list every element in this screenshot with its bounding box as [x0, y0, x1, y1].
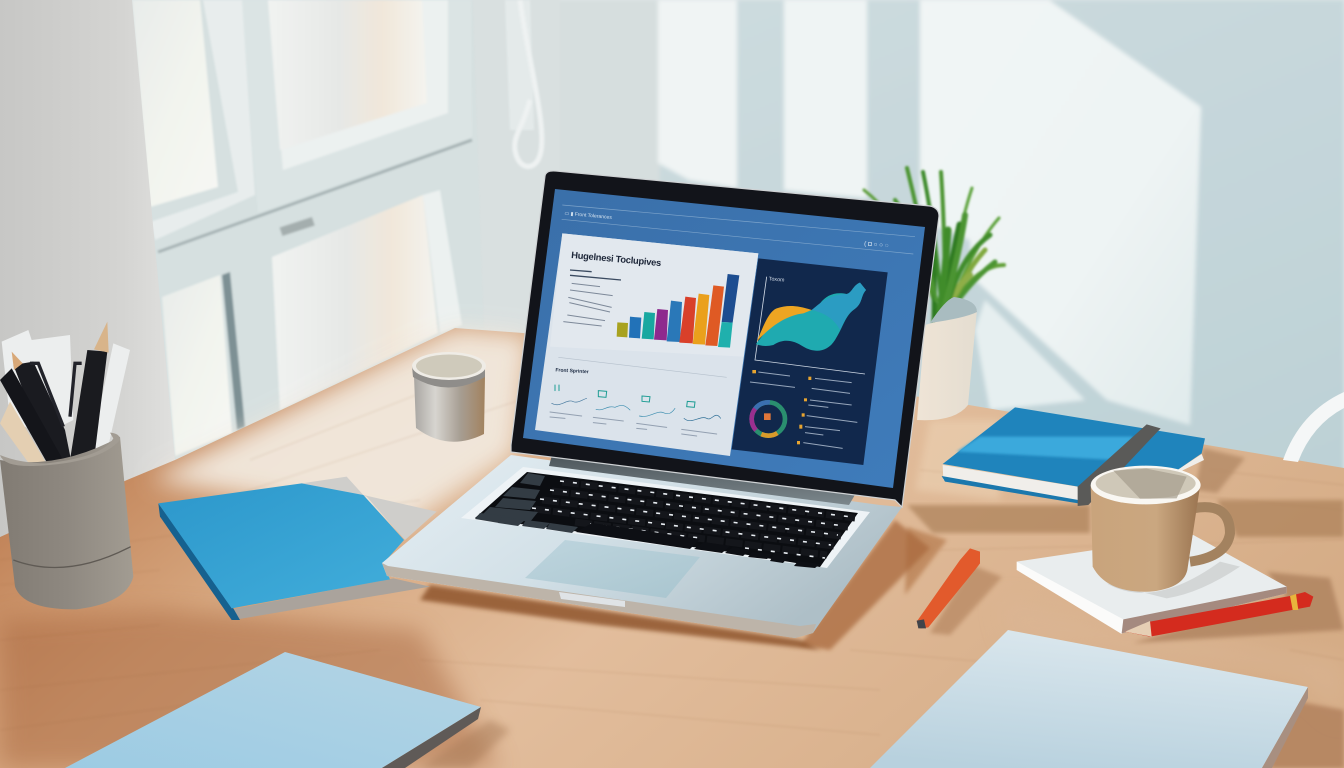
screen content in zoomed coordinates	[535, 205, 915, 465]
report bullet text	[563, 270, 621, 326]
sunlit wood	[150, 328, 530, 530]
area chart axes	[755, 277, 865, 374]
mug shadow	[1107, 562, 1240, 598]
window with white frames	[130, 0, 484, 465]
header bar: ( ◘ ○ ○ ◌	[864, 240, 889, 250]
arrow and bottom keys	[694, 542, 820, 568]
keyboard	[461, 467, 870, 568]
wood grain	[0, 370, 1344, 735]
header bar	[562, 205, 915, 254]
legend icons	[752, 370, 811, 444]
white notebook	[1017, 535, 1287, 634]
metal canister	[412, 352, 486, 442]
bar chart	[617, 274, 739, 348]
report title: Hugelnesi Toclupives	[571, 250, 662, 268]
laptop	[382, 171, 939, 638]
cast shadows	[907, 505, 1090, 533]
divider and section title	[555, 357, 727, 377]
mug opening	[1091, 466, 1201, 504]
plant	[864, 168, 1004, 325]
chair	[1283, 392, 1344, 462]
mug body	[1091, 485, 1200, 592]
dark analytics panel: Toxom	[769, 276, 785, 284]
space bar	[576, 523, 700, 549]
area chart	[756, 283, 866, 351]
divider and section title: Front Sprinter	[555, 367, 589, 375]
blue notebook left	[158, 477, 437, 620]
curtain cord and curtain	[473, 0, 560, 340]
modifier keys	[475, 473, 578, 533]
pencil cup with pens	[0, 322, 133, 609]
wall background with sun stripes	[0, 0, 1344, 560]
plant pot	[917, 297, 977, 420]
left wall	[0, 0, 175, 537]
bottom-left light blue folder	[65, 652, 481, 768]
cup body	[0, 437, 133, 609]
cup rim	[0, 433, 120, 466]
white packets	[2, 330, 130, 453]
pencils and pens	[0, 322, 109, 465]
mug handle	[1190, 507, 1230, 562]
white report panel	[535, 233, 758, 456]
white notebook and mug	[917, 466, 1313, 637]
bottom-right white paper	[870, 630, 1308, 768]
dark analytics panel	[732, 258, 888, 465]
legend text lines	[750, 372, 857, 448]
orange pen	[917, 548, 980, 628]
desk	[0, 328, 1344, 768]
sparkline cards	[550, 385, 721, 436]
trackpad	[525, 540, 700, 598]
red pencil	[1125, 592, 1313, 637]
donut chart	[752, 402, 785, 436]
screen	[523, 189, 925, 488]
hinge	[549, 455, 856, 505]
blue notebook right	[942, 407, 1205, 506]
lid bezel	[511, 171, 939, 507]
laptop base	[382, 455, 902, 638]
header bar: ▭ ▮ Front Tolerances	[564, 211, 613, 221]
